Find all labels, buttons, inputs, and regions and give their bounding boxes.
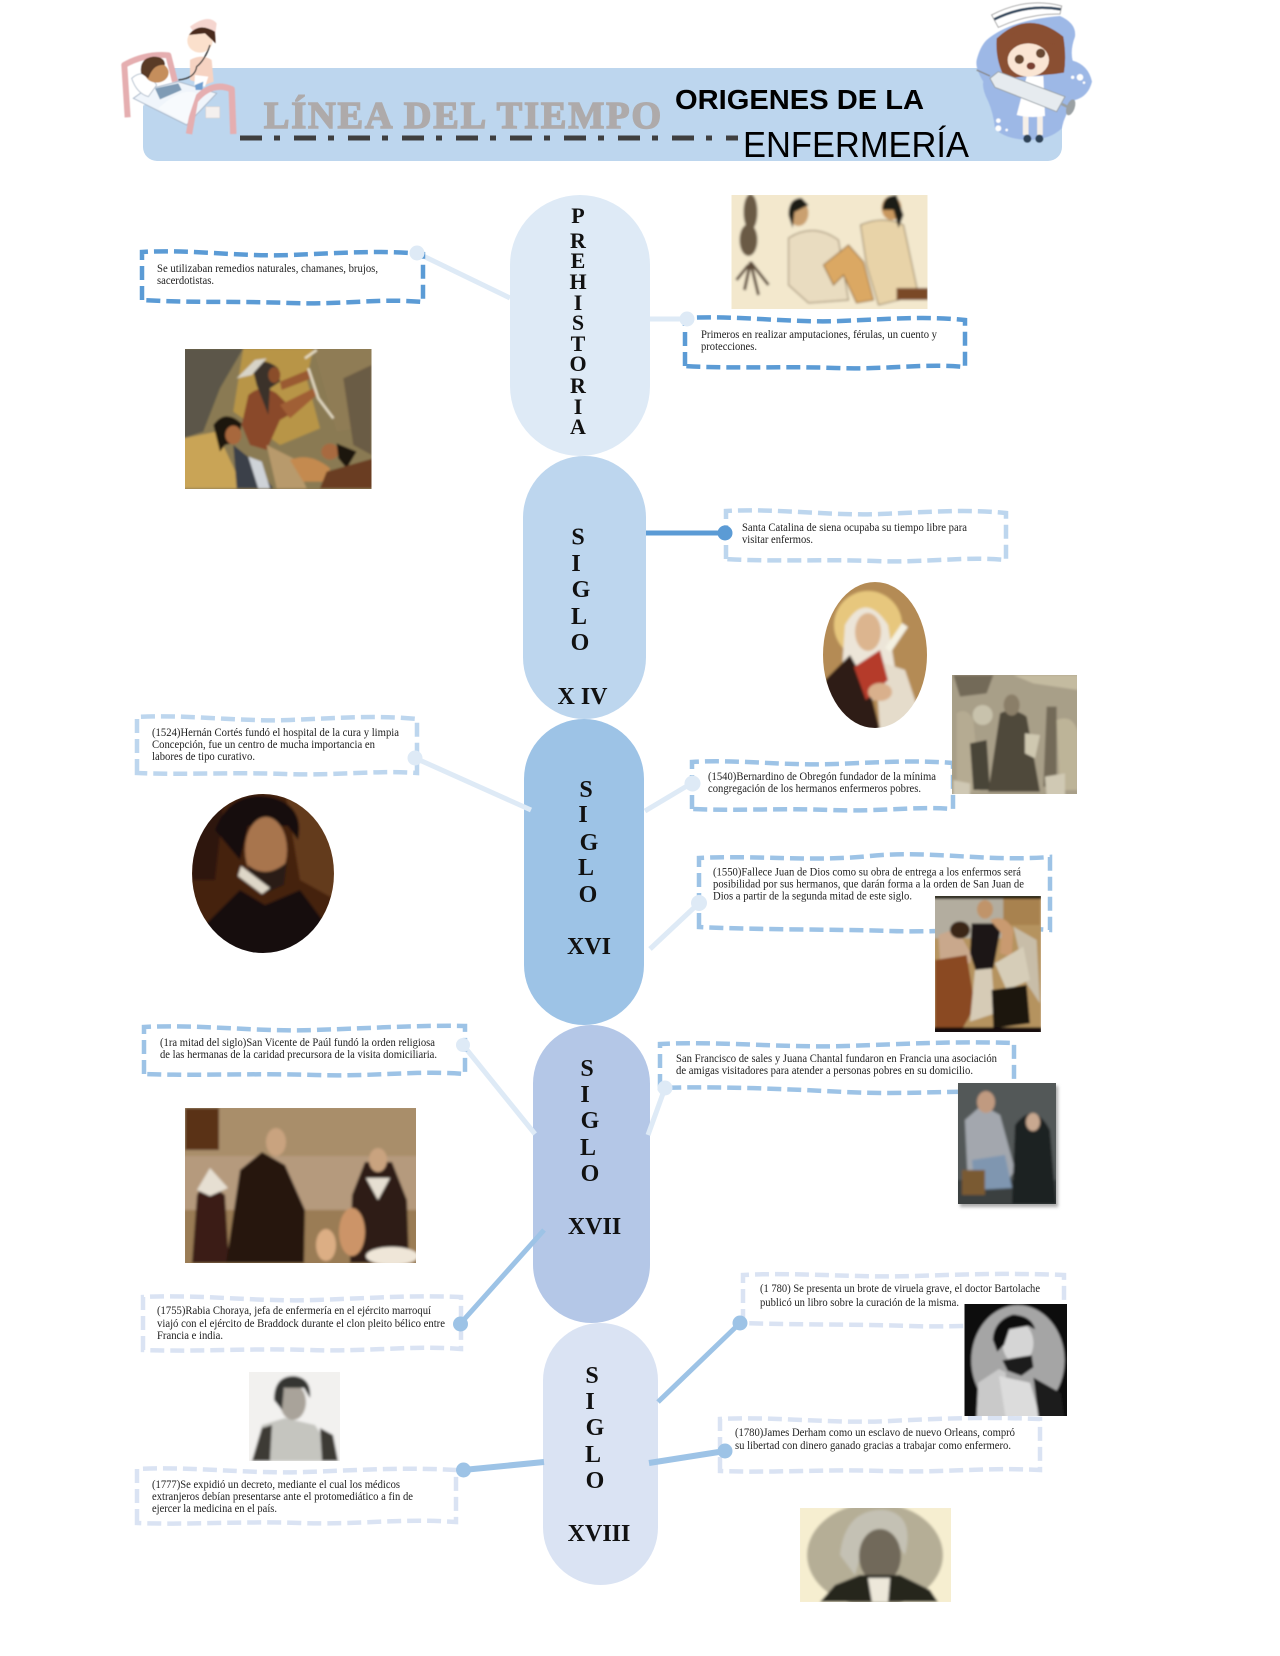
image: rabia choraya portrait bbox=[247, 1370, 342, 1463]
callout: 1777 decreto: ejercer la medicina en el país. bbox=[152, 1503, 277, 1515]
image: bernardino engraving bbox=[952, 675, 1077, 794]
callout: primeros amputaciones bbox=[680, 312, 965, 368]
pill: prehistoria bbox=[510, 195, 650, 456]
vertical label: prehistoria: O bbox=[569, 351, 587, 376]
callout: 1540 Bernardino bbox=[684, 761, 953, 810]
callout: remedios naturales bbox=[142, 246, 424, 303]
vertical label: prehistoria: R bbox=[570, 228, 587, 253]
callout: San Francisco de Sales: San Francisco de sales y Juana Chantal fundaron en Francia una asociación bbox=[676, 1053, 997, 1065]
image: san vicente de paúl painting bbox=[183, 1106, 419, 1266]
image: james derham portrait bbox=[800, 1508, 951, 1602]
vertical label: siglo XVIII: XVIII bbox=[568, 1521, 630, 1547]
callout: 1777 decreto: (1777)Se expidió un decreto, mediante el cual los médicos bbox=[152, 1479, 400, 1491]
callout: 1755 Rabia Choraya: viajó con el ejército de Braddock durante el clon pleito bélico entre bbox=[157, 1318, 445, 1330]
image: juan de dios painting bbox=[933, 895, 1042, 1034]
image: san francisco and juana chantal bbox=[958, 1083, 1056, 1204]
image: santa catalina oval portrait bbox=[820, 580, 930, 730]
connector: siglo XVI 1550 bbox=[650, 903, 699, 949]
vertical label: prehistoria: E bbox=[571, 248, 585, 273]
vertical label: prehistoria: R bbox=[570, 373, 587, 398]
callout: 1755 Rabia Choraya: Francia e india. bbox=[157, 1330, 223, 1342]
vertical label: siglo XIV bbox=[557, 524, 608, 710]
vertical label: prehistoria: T bbox=[571, 331, 586, 356]
vertical label: siglo XIV: S bbox=[571, 524, 585, 550]
callout: 1550 Juan de Dios: (1550)Fallece Juan de Dios como su obra de entrega a los enfermos será bbox=[713, 866, 1021, 878]
image: aztec healers codex bbox=[732, 195, 928, 309]
callout: 1524 Hernán Cortés: Concepción, fue un centro de mucha importancia en bbox=[152, 739, 375, 751]
callout: 1524 Hernán Cortés bbox=[137, 716, 422, 774]
connector: 1777 bbox=[463, 1462, 544, 1470]
callout: remedios naturales: Se utilizaban remedios naturales, chamanes, brujos, bbox=[157, 263, 378, 275]
callout: San Francisco de Sales bbox=[658, 1042, 1014, 1096]
vertical label: siglo XVIII: I bbox=[585, 1389, 595, 1415]
pill: siglo XVII bbox=[533, 1025, 650, 1323]
image: native healer painting bbox=[180, 345, 377, 492]
vertical label: siglo XVIII: G bbox=[586, 1415, 605, 1441]
vertical label: prehistoria bbox=[569, 203, 587, 439]
callout: 1780 viruela: (1 780) Se presenta un brote de viruela grave, el doctor Bartolache bbox=[760, 1283, 1040, 1295]
vertical label: siglo XVII: I bbox=[580, 1082, 590, 1108]
connector: siglo XVI 1540 bbox=[645, 783, 692, 811]
callout: 1780 viruela: publicó un libro sobre la curación de la misma. bbox=[760, 1297, 959, 1309]
connector: 1780 James bbox=[649, 1451, 725, 1463]
icon: chibi nurse holding syringe bbox=[976, 3, 1092, 143]
callout: santa catalina: Santa Catalina de siena ocupaba su tiempo libre para bbox=[742, 522, 967, 534]
callout: santa catalina: visitar enfermos. bbox=[742, 534, 813, 546]
callout: 1755 Rabia Choraya: (1755)Rabia Choraya, jefa de enfermería en el ejército marroquí bbox=[157, 1305, 432, 1317]
connector: siglo XIV right bbox=[646, 530, 725, 536]
image: hernán cortés oval portrait bbox=[190, 790, 336, 960]
vertical label: siglo XVII bbox=[568, 1056, 621, 1240]
vertical label: siglo XVI: O bbox=[579, 882, 597, 908]
vertical label: siglo XIV: O bbox=[571, 630, 589, 656]
callout: 1ra mitad San Vicente: de las hermanas de la caridad precursora de la visita domiciliaria. bbox=[160, 1049, 437, 1061]
vertical label: siglo XVI: L bbox=[578, 855, 594, 881]
banner band bbox=[143, 68, 1062, 161]
vertical label: prehistoria: P bbox=[571, 203, 585, 228]
callout: 1777 decreto: extranjeros debían presentarse ante el protomediático a fin de bbox=[152, 1491, 413, 1503]
vertical label: siglo XVIII: L bbox=[585, 1442, 601, 1468]
pill: siglo XVIII bbox=[543, 1323, 658, 1585]
callout: 1550 Juan de Dios bbox=[691, 854, 1050, 931]
connector: 1780 viruela bbox=[658, 1323, 740, 1402]
callout: remedios naturales: sacerdotistas. bbox=[157, 275, 214, 287]
callout: 1755 Rabia Choraya bbox=[143, 1296, 468, 1351]
title: línea del tiempo: LÍNEA DEL TIEMPO bbox=[264, 95, 661, 137]
vertical label: siglo XVIII: O bbox=[586, 1468, 604, 1494]
vertical label: siglo XVII: S bbox=[580, 1056, 594, 1082]
callout: 1540 Bernardino: congregación de los hermanos enfermeros pobres. bbox=[708, 783, 921, 795]
vertical label: siglo XVII: L bbox=[580, 1135, 596, 1161]
connector: siglo XVI 1524 bbox=[415, 758, 531, 810]
callout: santa catalina bbox=[718, 510, 1006, 561]
image: bartolache engraving bbox=[964, 1304, 1067, 1416]
vertical label: prehistoria: I bbox=[574, 394, 582, 419]
title: enfermería: ENFERMERÍA bbox=[743, 124, 969, 165]
callout: 1524 Hernán Cortés: (1524)Hernán Cortés fundó el hospital de la cura y limpia bbox=[152, 727, 399, 739]
callout: 1ra mitad San Vicente: (1ra mitad del siglo)San Vicente de Paúl fundó la orden religiosa bbox=[160, 1037, 435, 1049]
pill: siglo XIV bbox=[523, 456, 646, 719]
callout: primeros amputaciones: protecciones. bbox=[701, 341, 757, 353]
connector: prehistoria right bbox=[650, 316, 688, 322]
header banner bbox=[124, 3, 1092, 165]
title underline dash-dot bbox=[240, 136, 738, 140]
pill: siglo XVI bbox=[524, 719, 644, 1025]
vertical label: prehistoria: I bbox=[574, 290, 582, 315]
vertical label: siglo XVII: XVII bbox=[568, 1214, 621, 1240]
callout: 1780 viruela bbox=[732, 1274, 1064, 1330]
vertical label: siglo XVIII: S bbox=[585, 1363, 599, 1389]
connector: prehistoria left bbox=[417, 253, 510, 298]
callout: 1550 Juan de Dios: Dios a partir de la segunda mitad de este siglo. bbox=[713, 891, 912, 903]
callout: primeros amputaciones: Primeros en realizar amputaciones, férulas, un cuento y bbox=[701, 329, 937, 341]
callout: San Francisco de Sales: de amigas visitadores para atender a personas pobres en su domicilio. bbox=[676, 1065, 973, 1077]
vertical label: siglo XVI: I bbox=[578, 802, 588, 828]
icon: nurse with patient in bed bbox=[124, 19, 233, 134]
callout: 1ra mitad San Vicente bbox=[144, 1026, 470, 1075]
callout: 1780 James Derham: (1780)James Derham como un esclavo de nuevo Orleans, compró bbox=[735, 1427, 1015, 1439]
connector: siglo XVII right bbox=[648, 1088, 665, 1135]
vertical label: siglo XVI: XVI bbox=[567, 934, 611, 960]
vertical label: siglo XVII: O bbox=[581, 1161, 599, 1187]
callout: 1524 Hernán Cortés: labores de tipo curativo. bbox=[152, 751, 255, 763]
vertical label: siglo XIV: G bbox=[572, 577, 591, 603]
callout: 1550 Juan de Dios: posibilidad por sus hermanos, que darán forma a la orden de San Juan de bbox=[713, 879, 1024, 891]
callout: 1540 Bernardino: (1540)Bernardino de Obregón fundador de la mínima bbox=[708, 771, 936, 783]
vertical label: siglo XIV: L bbox=[571, 604, 587, 630]
vertical label: prehistoria: A bbox=[570, 414, 586, 439]
vertical label: siglo XVI bbox=[567, 777, 611, 960]
connector: 1755 bbox=[460, 1230, 544, 1324]
vertical label: prehistoria: S bbox=[572, 310, 584, 335]
vertical label: siglo XIV: X IV bbox=[557, 684, 608, 710]
callout: 1780 James Derham: su libertad con dinero ganado gracias a trabajar como enfermero. bbox=[735, 1440, 1011, 1452]
vertical label: siglo XIV: I bbox=[571, 551, 581, 577]
title: orígenes de la: ORIGENES DE LA bbox=[675, 84, 924, 115]
image shadow: san francisco de sales painting bbox=[960, 1086, 1058, 1207]
connector: siglo XVII left bbox=[463, 1045, 535, 1134]
vertical label: siglo XVI: G bbox=[580, 830, 599, 856]
callout: 1777 decreto bbox=[137, 1462, 471, 1524]
callout: 1780 James Derham bbox=[718, 1418, 1040, 1472]
vertical label: siglo XVIII bbox=[568, 1363, 630, 1547]
vertical label: siglo XVI: S bbox=[579, 777, 593, 803]
vertical label: siglo XVII: G bbox=[581, 1108, 600, 1134]
vertical label: prehistoria: H bbox=[569, 269, 587, 294]
